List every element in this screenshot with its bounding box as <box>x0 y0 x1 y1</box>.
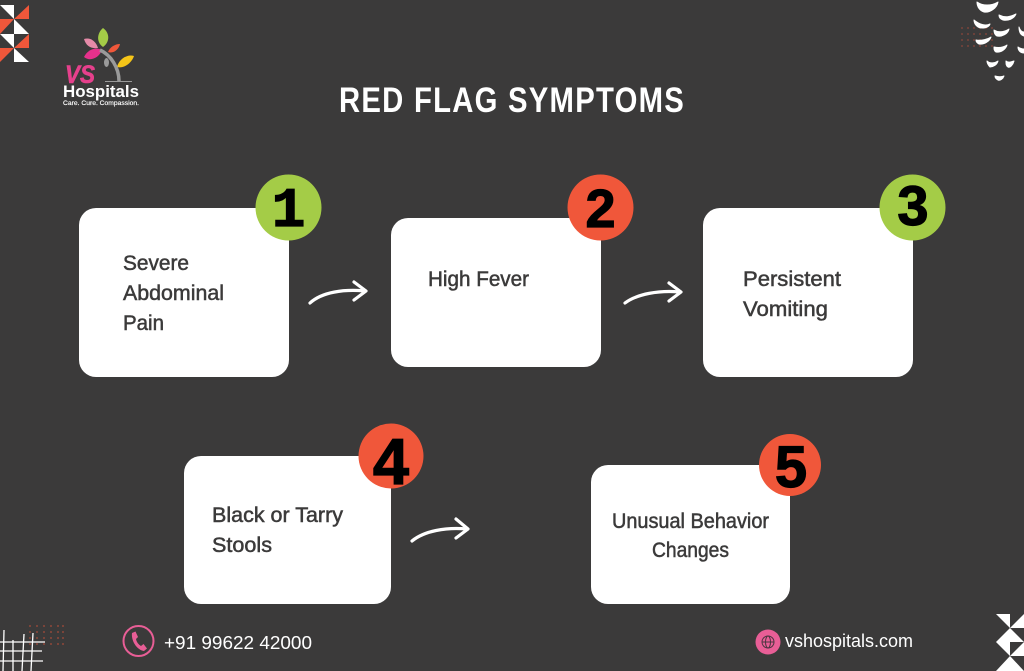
card 5: Unusual Behavior Changes <box>591 434 821 604</box>
logo text: Hospitals: Hospitals <box>63 82 139 101</box>
badge 4 <box>358 424 424 498</box>
card 2: High Fever <box>391 174 634 367</box>
logo: VS Hospitals <box>63 28 139 107</box>
card 1 text: Severe <box>123 252 189 275</box>
card 1: Severe Abdominal Pain <box>79 174 322 377</box>
arrow 1 to 2 <box>310 282 366 303</box>
phone number: +91 99622 42000 <box>164 633 312 653</box>
badge 5 <box>759 434 821 500</box>
website contact <box>756 630 913 654</box>
badge 5: 5 <box>775 435 807 500</box>
card 1 text: Abdominal <box>123 282 224 305</box>
badge 4: 4 <box>373 425 409 498</box>
decoration: bottom-right triangles <box>996 614 1024 671</box>
badge 1: 1 <box>272 179 305 243</box>
card 4 text: Stools <box>212 534 272 557</box>
card 3: Persistent Vomiting <box>703 174 946 377</box>
card 5 text: Changes <box>652 539 729 562</box>
card 3 text <box>743 268 841 321</box>
decoration: bottom-left hatch and dots <box>0 625 64 671</box>
card 1 text <box>123 252 224 335</box>
logo text: VS: VS <box>65 61 95 89</box>
website address: vshospitals.com <box>785 631 913 651</box>
card 2 text: High Fever <box>428 268 529 291</box>
icon: phone <box>124 626 154 656</box>
card 4: Black or Tarry Stools <box>184 424 424 604</box>
phone contact <box>124 626 312 656</box>
card 3 text: Vomiting <box>743 298 828 321</box>
card 5 text <box>612 510 769 562</box>
arrow 4 to 5 <box>412 519 468 541</box>
decoration: top-right white petals and dots <box>961 2 1024 80</box>
badge 3 <box>880 174 946 240</box>
card 4 text <box>212 504 344 557</box>
card 4 text: Black or Tarry <box>212 504 344 527</box>
title: RED FLAG SYMPTOMS <box>339 81 685 120</box>
card 1 text: Pain <box>123 312 164 335</box>
logo text: tagline: Care. Cure. Compassion. <box>63 100 139 107</box>
badge 3: 3 <box>897 174 929 237</box>
icon: globe <box>756 630 780 654</box>
badge 2 <box>568 174 634 240</box>
card 3 text: Persistent <box>743 268 841 291</box>
icon: tree with leaves <box>84 28 134 82</box>
arrow 2 to 3 <box>625 283 681 303</box>
card 5 text: Unusual Behavior <box>612 510 769 533</box>
badge 1 <box>256 174 322 243</box>
badge 2: 2 <box>585 179 616 239</box>
decoration: top-left triangles <box>0 5 29 62</box>
